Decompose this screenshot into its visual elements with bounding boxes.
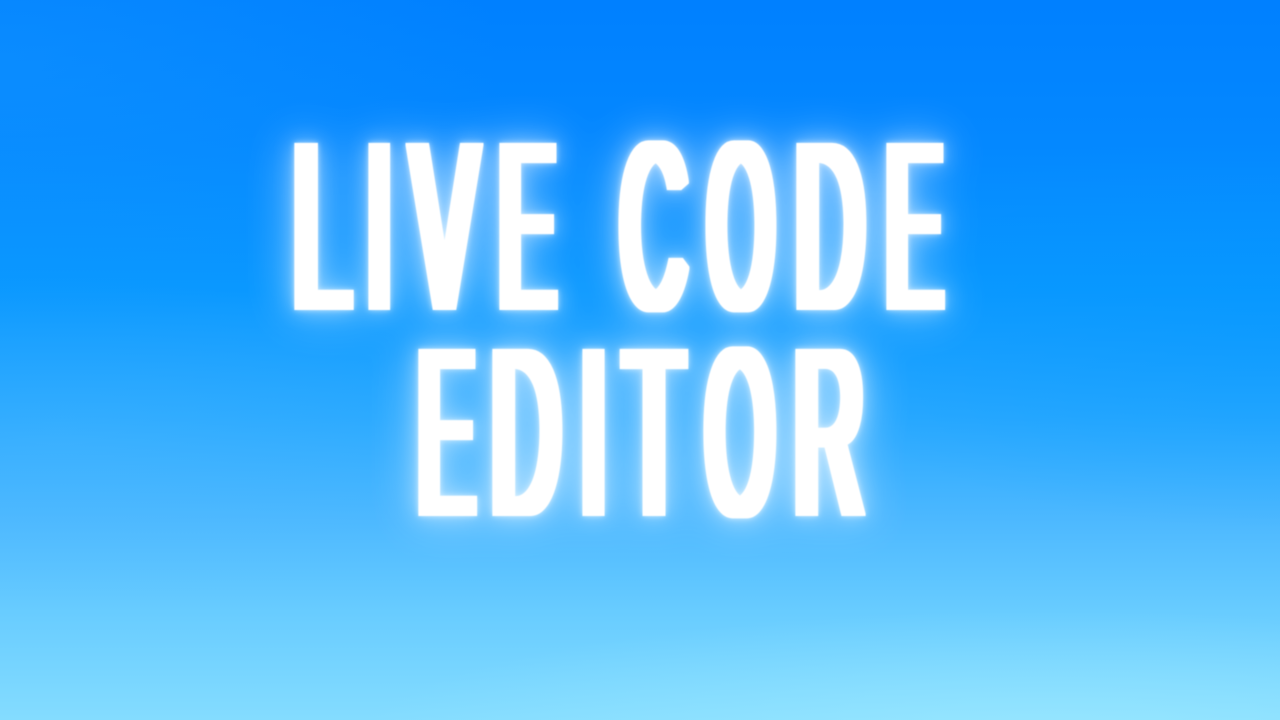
title line 1: LIVE CODE: E [500, 94, 555, 361]
title line 2: EDITOR: D [492, 298, 560, 566]
title line 2: EDITOR: T [624, 297, 684, 566]
title line 1: LIVE CODE: D [796, 92, 864, 360]
title line 1: LIVE CODE: L [293, 93, 350, 361]
title line 2: EDITOR [419, 297, 863, 567]
title line 1: LIVE CODE: V [412, 91, 477, 360]
title line 1: LIVE CODE: C [621, 93, 686, 361]
title line 2: EDITOR: O [706, 299, 774, 567]
title line 2: EDITOR: I [581, 299, 606, 567]
title line 2: EDITOR: E [419, 300, 474, 567]
title line 2: EDITOR: R [795, 298, 863, 566]
title line 1: LIVE CODE [293, 91, 942, 361]
title line 1: LIVE CODE: O [708, 93, 773, 361]
title line 1: LIVE CODE: E [887, 94, 942, 361]
title line 1: LIVE CODE: I [368, 94, 391, 361]
title: LIVE CODE EDITOR [293, 91, 942, 567]
